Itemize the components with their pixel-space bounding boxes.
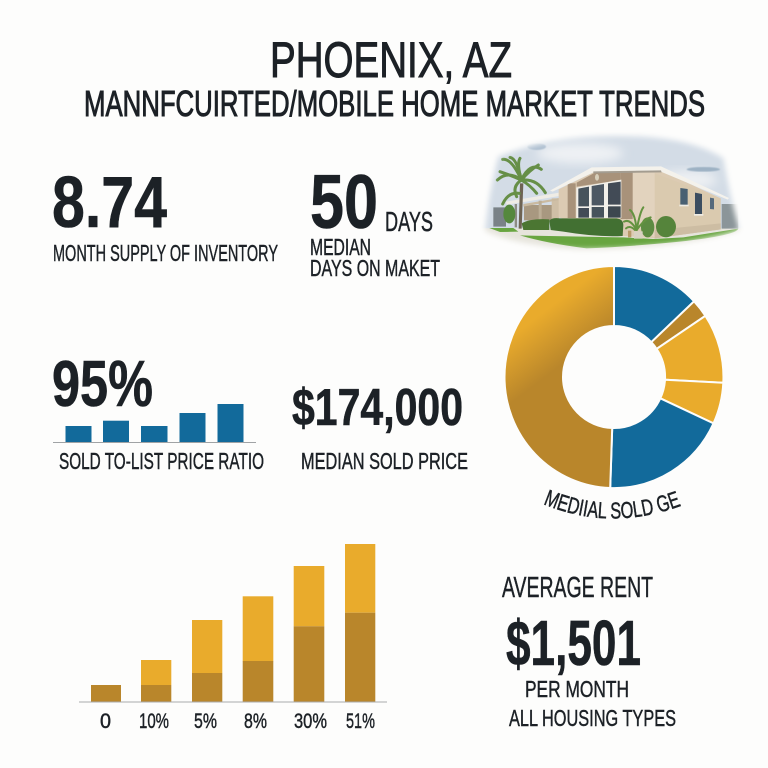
stat: sold-to-list price ratio: 95% — [52, 347, 153, 420]
stat: median days on market: 50 — [310, 160, 378, 245]
title: PHOENIX, AZ — [270, 32, 512, 88]
stat: sold-to-list price ratio — [52, 347, 264, 474]
segment: brown small — [651, 301, 705, 349]
axis labels: 0 — [100, 710, 111, 733]
stat: average rent: AVERAGE RENT — [502, 572, 653, 604]
lawn — [520, 229, 738, 248]
stat: median sold price — [292, 379, 468, 474]
segment: blue top — [614, 266, 694, 342]
stat: month supply of inventory: 8.74 — [52, 163, 167, 243]
side windows — [680, 188, 688, 205]
mini bar chart — [66, 404, 244, 442]
axis labels: 30% — [294, 710, 327, 733]
stat: median sold price: $174,000 — [292, 379, 463, 437]
stat: average rent: $1,501 — [506, 607, 641, 679]
donut label: MEDIIAL SOLD GE — [544, 490, 681, 519]
photo: manufactured home — [483, 134, 740, 251]
axis labels: 5% — [194, 710, 217, 733]
palm tree — [519, 183, 523, 229]
stat: average rent: ALL HOUSING TYPES — [509, 705, 676, 731]
donut chart — [504, 266, 723, 488]
segment: gold upper right — [657, 316, 723, 383]
stat: median days on market: DAYS — [385, 206, 433, 237]
stat: median days on market: DAYS ON MAKET — [310, 255, 440, 281]
front windows — [576, 180, 621, 218]
segment: gold lower right — [660, 380, 723, 423]
axis labels: 51% — [346, 710, 375, 733]
stat: median sold price: MEDIAN SOLD PRICE — [301, 448, 468, 474]
segment: gold to brown left — [504, 266, 614, 488]
stat: month supply of inventory: MONTH SUPPLY OF INVENTORY — [53, 240, 278, 266]
axis labels: 8% — [244, 710, 267, 733]
stacked bar chart — [79, 544, 387, 733]
axis labels: 10% — [139, 710, 169, 733]
hedge — [549, 218, 623, 236]
stat: average rent: PER MONTH — [525, 676, 629, 702]
stat: average rent — [502, 572, 676, 731]
main house walls — [559, 171, 721, 238]
background buildings — [493, 207, 506, 227]
stat: sold-to-list price ratio: SOLD TO-LIST PRICE RATIO — [59, 448, 264, 474]
axis labels — [100, 710, 375, 733]
segment: blue bottom — [610, 398, 714, 488]
stat: median days on market: MEDIAN — [310, 234, 371, 260]
carport — [524, 205, 552, 220]
stat: median days on market — [310, 160, 440, 281]
stat: month supply of inventory — [52, 163, 278, 266]
gable and brick columns — [577, 172, 621, 187]
roof — [550, 166, 729, 200]
